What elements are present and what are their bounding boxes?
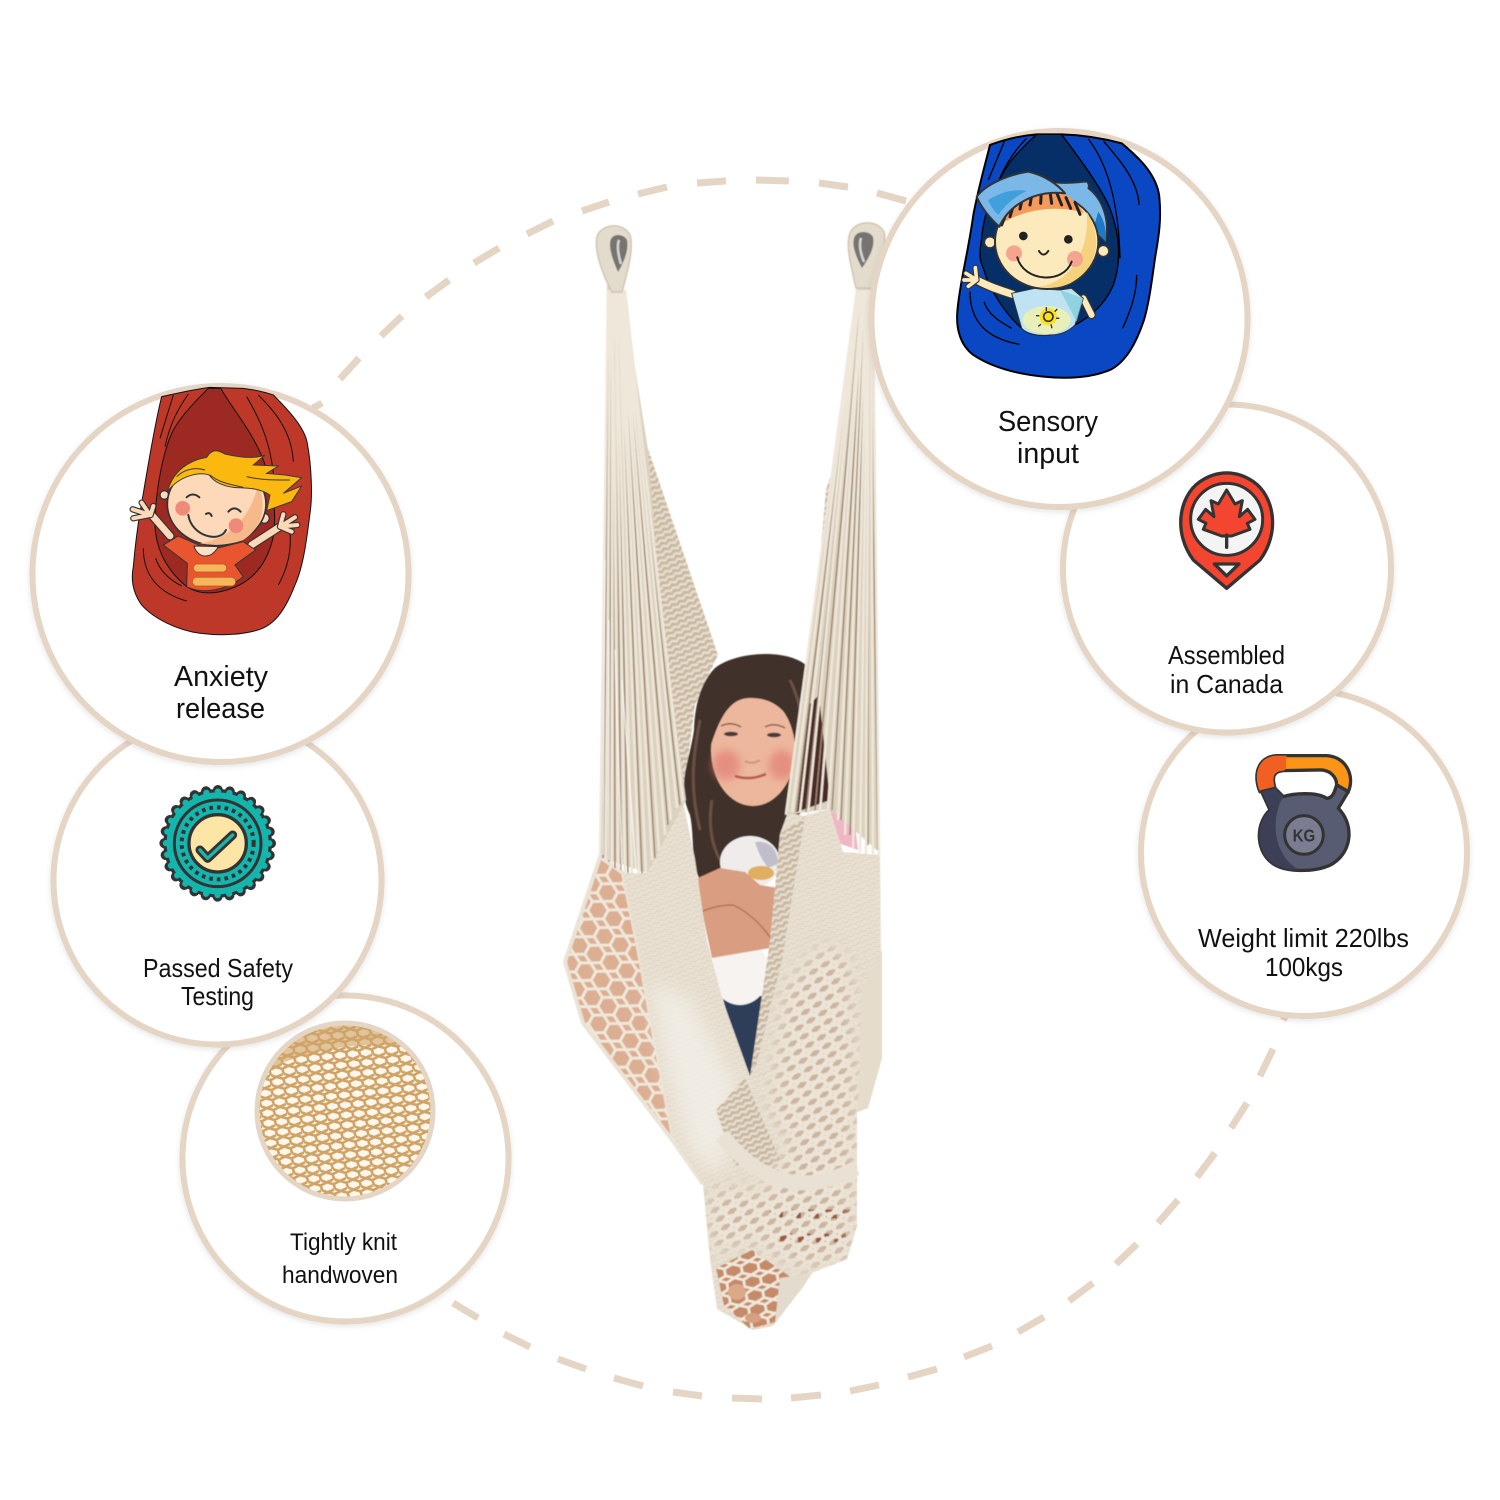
open mesh of the right panel and sling — [704, 940, 860, 1274]
panel: passed safety testing — [54, 716, 382, 1044]
illustration: red hammock child — [132, 387, 311, 635]
crossed arms — [698, 868, 778, 958]
foot mesh — [716, 1250, 812, 1329]
label: passed safety testing — [143, 953, 293, 1011]
left rope bundle — [600, 285, 686, 873]
girl face — [711, 688, 799, 806]
label: anxiety release: Anxiety — [174, 661, 268, 693]
label: weight limit: Weight limit 220lbs — [1198, 923, 1409, 953]
label: tightly knit handwoven: handwoven — [282, 1262, 398, 1289]
penguin beak — [748, 866, 774, 880]
center fold — [716, 1078, 780, 1172]
label: weight limit: 100kgs — [1265, 952, 1343, 982]
label: anxiety release: release — [176, 693, 265, 725]
panel: weight limit — [1141, 690, 1467, 1016]
icon: kettlebell — [1257, 756, 1351, 870]
label: tightly knit handwoven: Tightly knit — [290, 1229, 397, 1256]
fabric swatch — [255, 1021, 435, 1201]
right rope bundle — [785, 285, 879, 856]
panel: tightly knit — [182, 996, 508, 1322]
label: sensory input: Sensory — [998, 406, 1098, 438]
penguin toy body — [711, 939, 769, 1005]
hammock body — [623, 801, 882, 1330]
jeans — [722, 996, 767, 1080]
left hanging loop — [596, 226, 631, 292]
panel: sensory input — [872, 131, 1248, 507]
label: passed safety testing: Passed Safety — [143, 953, 293, 983]
label: sensory input: input — [1017, 438, 1079, 470]
fold strip — [750, 816, 805, 1076]
label: weight limit — [1198, 923, 1409, 982]
girl hair — [684, 654, 818, 880]
illustration: blue hammock child — [957, 134, 1160, 378]
dashed ring around hammock — [313, 180, 1287, 1399]
right hanging loop — [848, 223, 885, 288]
left net lobe showing leg — [565, 857, 703, 1184]
label: assembled in canada: in Canada — [1170, 669, 1284, 699]
woven back of the hammock, left — [645, 440, 718, 790]
pink shirt — [826, 800, 858, 850]
outer right flap — [858, 950, 882, 1112]
label: anxiety release — [174, 661, 268, 725]
sling crease — [722, 1135, 856, 1183]
penguin toy head — [720, 836, 780, 888]
label: assembled in canada: Assembled — [1168, 640, 1285, 670]
label: passed safety testing: Testing — [181, 981, 254, 1011]
label: assembled in canada — [1168, 640, 1285, 699]
panel: assembled in canada — [1063, 404, 1391, 732]
soft pale area, left panel — [650, 980, 735, 1175]
woven back of the hammock, right — [812, 455, 838, 650]
panel: anxiety release — [32, 386, 408, 762]
hammock photo with girl — [565, 223, 885, 1330]
icon: canada location pin — [1181, 473, 1273, 588]
icon: safety badge — [163, 789, 272, 898]
label: tightly knit handwoven — [282, 1229, 398, 1289]
dark gap beside the face — [797, 695, 830, 812]
label: sensory input — [998, 406, 1098, 470]
icon: kettlebell: KG — [1293, 826, 1315, 846]
